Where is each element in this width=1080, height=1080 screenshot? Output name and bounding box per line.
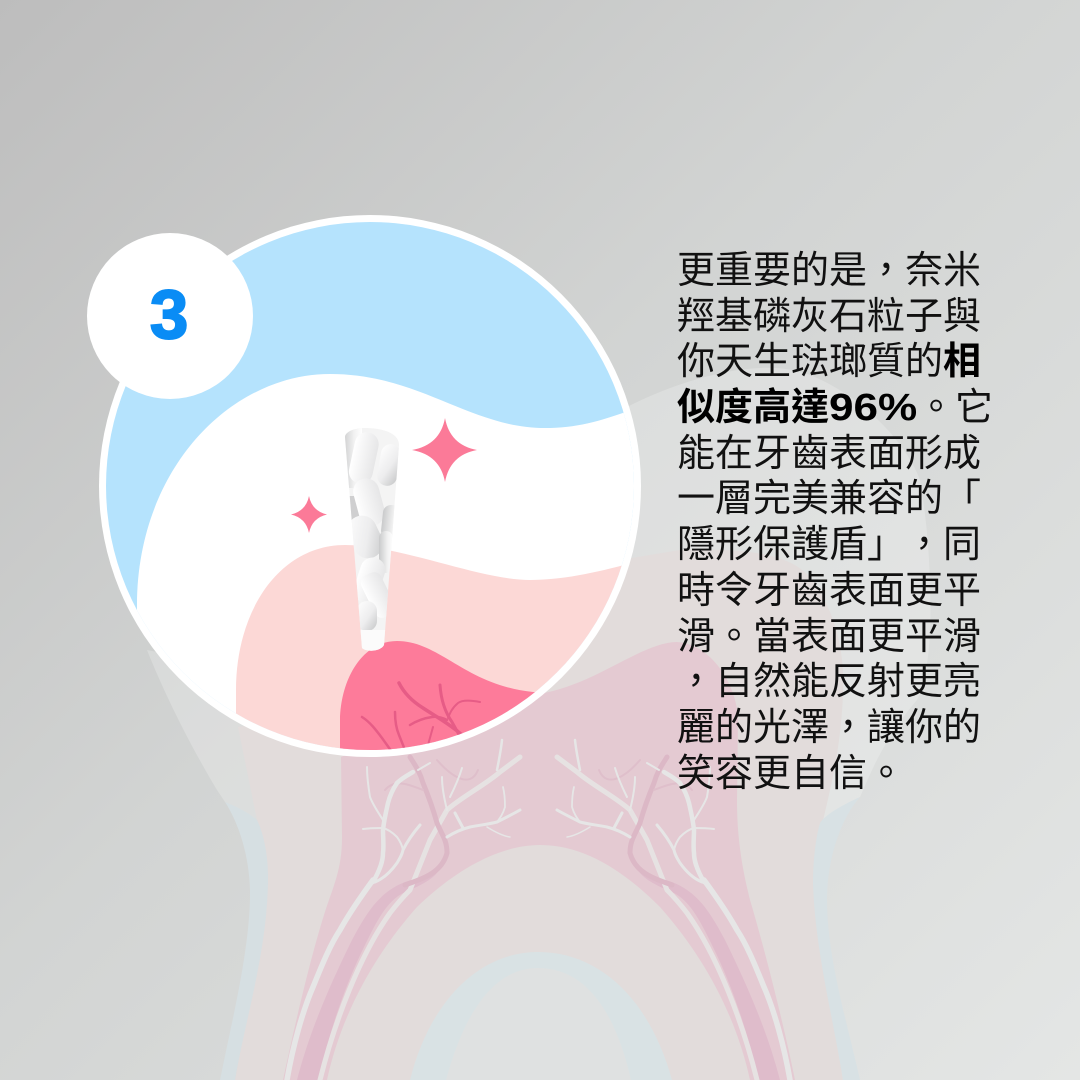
body text: 96% xyxy=(829,387,917,429)
badge circle xyxy=(87,233,253,399)
blue background layer xyxy=(100,216,645,761)
badge number: 3 xyxy=(150,276,188,353)
small sparkle xyxy=(291,496,327,533)
tooth pulp xyxy=(283,642,795,1080)
tooth cementum right xyxy=(813,797,860,1080)
body text: 更重要的是，奈米 xyxy=(677,250,981,292)
tooth dentin xyxy=(235,550,843,1080)
circle white ring xyxy=(99,215,641,757)
hot pink pulp xyxy=(340,641,535,750)
body text: 羥基磷灰石粒子與 xyxy=(677,296,981,338)
large sparkle xyxy=(412,418,477,482)
enamel crack filled with particles xyxy=(345,428,399,651)
inner root arch xyxy=(410,952,672,1080)
particle capsules xyxy=(345,428,398,651)
white enamel wave xyxy=(137,374,650,770)
inner root space xyxy=(446,968,631,1080)
body text: 時令牙齒表面更平 xyxy=(677,570,981,612)
number badge xyxy=(87,233,253,399)
body text xyxy=(677,250,993,795)
pulp vessels xyxy=(362,683,480,752)
tooth enamel crown xyxy=(147,368,930,823)
right vessels xyxy=(557,740,790,1080)
magnified tooth circle xyxy=(99,215,650,770)
body text: 你天生琺瑯質的相 xyxy=(677,341,981,383)
body text: 滑。當表面更平滑 xyxy=(677,616,981,658)
tooth cementum left xyxy=(220,802,268,1080)
background tooth illustration xyxy=(147,368,930,1080)
body text: 能在牙齒表面形成 xyxy=(677,433,981,475)
body text: ，自然能反射更亮 xyxy=(677,661,981,703)
body text: 隱形保護盾」，同 xyxy=(677,524,981,566)
body text: 一層完美兼容的「 xyxy=(677,478,981,520)
body text: 笑容更自信。 xyxy=(677,753,905,795)
light pink dentin wave xyxy=(236,545,622,750)
body text: 似度高達 。它 xyxy=(677,387,993,429)
left vessels xyxy=(287,740,520,1080)
body text: 麗的光澤，讓你的 xyxy=(677,707,981,749)
